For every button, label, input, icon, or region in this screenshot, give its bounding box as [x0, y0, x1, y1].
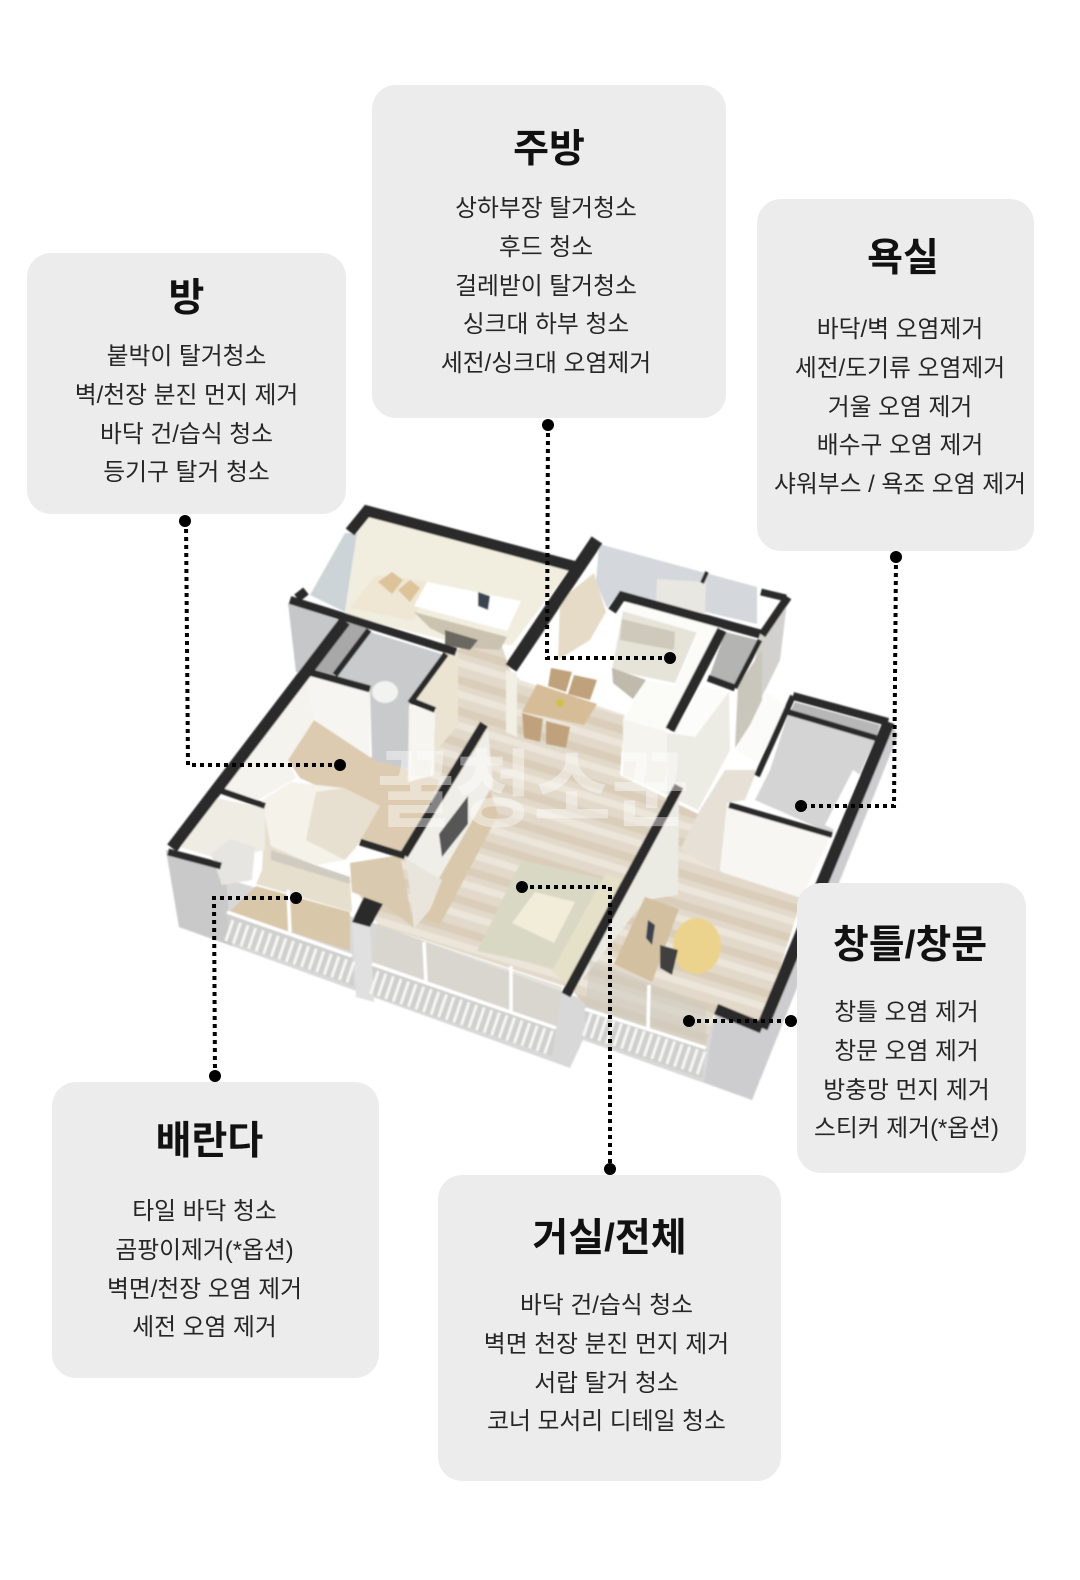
text: balcony tasks: 세전 오염 제거 — [132, 1314, 277, 1341]
text: window tasks: 창문 오염 제거 — [834, 1038, 979, 1065]
floors — [229, 640, 802, 1048]
text: window tasks: 방충망 먼지 제거 — [823, 1077, 990, 1104]
dining table and chairs — [506, 668, 597, 748]
text: living room tasks: 바닥 건/습식 청소 — [520, 1292, 693, 1319]
closet and bathroom — [307, 621, 458, 782]
text: bathroom tasks: 세전/도기류 오염제거 — [795, 355, 1005, 382]
text: bathroom tasks: 배수구 오염 제거 — [817, 432, 983, 459]
text: window tasks: 창틀 오염 제거 — [834, 999, 979, 1026]
panel: balcony — [52, 1082, 379, 1378]
text: living room tasks: 벽면 천장 분진 먼지 제거 — [484, 1331, 729, 1358]
text: room tasks: 바닥 건/습식 청소 — [100, 421, 273, 448]
text: room tasks: 벽/천장 분진 먼지 제거 — [75, 382, 298, 409]
heading: balcony: 배란다 — [156, 1120, 263, 1163]
text: balcony tasks — [107, 1198, 302, 1341]
exterior walls — [166, 595, 898, 1100]
text: balcony tasks: 곰팡이제거(*옵션) — [115, 1237, 294, 1264]
black wall tops — [168, 511, 889, 1028]
right bathroom — [735, 690, 880, 834]
text: kitchen tasks: 후드 청소 — [499, 234, 593, 261]
watermark: 꿀청소꾼 — [377, 744, 689, 839]
text: kitchen tasks — [441, 195, 651, 377]
text: balcony tasks: 벽면/천장 오염 제거 — [107, 1276, 302, 1303]
heading: kitchen: 주방 — [513, 128, 585, 171]
living room furniture — [477, 860, 622, 987]
kitchen and utility balcony — [558, 544, 762, 810]
panel: kitchen — [372, 85, 726, 418]
panel: room — [27, 253, 346, 514]
text: bathroom tasks — [774, 316, 1026, 498]
panel: bathroom — [757, 199, 1034, 551]
text: bathroom tasks: 샤워부스 / 욕조 오염 제거 — [774, 471, 1026, 498]
heading: window frames: 창틀/창문 — [833, 924, 987, 967]
balcony pier — [352, 897, 383, 1002]
text: kitchen tasks: 세전/싱크대 오염제거 — [441, 350, 651, 377]
text: room tasks — [75, 343, 298, 486]
laundry balcony room — [180, 798, 265, 885]
wood door and tv wall — [350, 729, 498, 928]
text: window tasks: 스티커 제거(*옵션) — [814, 1115, 999, 1142]
panel: living room and whole house — [438, 1175, 781, 1481]
main bedroom — [222, 675, 380, 912]
right room with desk — [568, 790, 832, 995]
text: kitchen tasks: 상하부장 탈거청소 — [455, 195, 637, 222]
text: bathroom tasks: 바닥/벽 오염제거 — [817, 316, 983, 343]
text: room tasks: 붙박이 탈거청소 — [107, 343, 266, 370]
panel: window frames — [797, 883, 1026, 1173]
text: kitchen tasks: 싱크대 하부 청소 — [463, 311, 629, 338]
heading: bathroom: 욕실 — [867, 237, 939, 280]
text: room tasks: 등기구 탈거 청소 — [103, 459, 270, 486]
text: living room tasks: 서랍 탈거 청소 — [534, 1370, 679, 1397]
text: balcony tasks: 타일 바닥 청소 — [132, 1198, 277, 1225]
text: kitchen tasks: 걸레받이 탈거청소 — [455, 273, 637, 300]
balcony glass and railings — [227, 890, 706, 1078]
top-left study room — [310, 512, 572, 650]
heading: room: 방 — [169, 277, 204, 320]
text: bathroom tasks: 거울 오염 제거 — [828, 394, 972, 421]
text: living room tasks: 코너 모서리 디테일 청소 — [487, 1408, 726, 1435]
heading: living room: 거실/전체 — [532, 1217, 687, 1260]
text: window tasks — [814, 999, 999, 1142]
text: living room tasks — [484, 1292, 729, 1435]
